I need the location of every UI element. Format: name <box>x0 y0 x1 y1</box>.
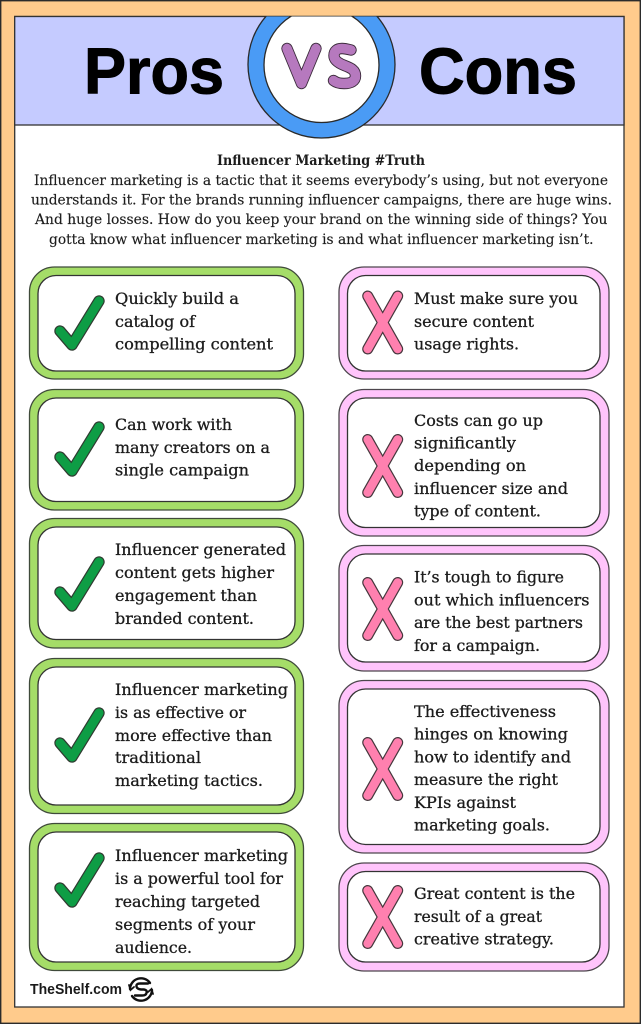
pro 5 text <box>115 846 288 957</box>
pro 1 text <box>115 289 274 354</box>
icon: check mark <box>60 858 99 902</box>
con 4 text: KPIs against <box>414 793 517 812</box>
pro 5 text: audience. <box>115 938 192 957</box>
pro 4 text <box>115 680 288 790</box>
con 3 text: out which influencers <box>414 590 590 610</box>
con 4 text: measure the right <box>414 770 559 789</box>
con 3 text: for a campaign. <box>414 636 540 655</box>
pro 3 text: content gets higher <box>115 563 274 582</box>
con 1 text: usage rights. <box>414 334 519 354</box>
pro 3 text: Influencer generated <box>115 540 286 559</box>
pro 3 text: branded content. <box>115 609 254 628</box>
intro paragraph <box>31 173 612 248</box>
intro heading: Influencer Marketing #Truth <box>217 153 425 169</box>
panel: pro 4 <box>30 658 304 814</box>
intro paragraph: gotta know what influencer marketing is and what influencer marketing isn’t. <box>49 232 594 248</box>
panel: pro 3 <box>30 518 304 648</box>
icon: X mark <box>368 296 398 349</box>
con 3 text: are the best partners <box>414 613 583 632</box>
panel: pro 1 <box>30 267 304 379</box>
pro 3 text: engagement than <box>115 586 257 605</box>
intro paragraph: understands it. For the brands running influencer campaigns, there are huge wins. <box>31 192 612 208</box>
con 5 text: Great content is the <box>414 884 575 903</box>
con 2 text: Costs can go up <box>414 411 543 430</box>
icon: check mark <box>60 562 99 606</box>
heading: Pros: Pros <box>84 34 224 108</box>
pro 3 text <box>115 540 286 628</box>
icon: check mark <box>60 301 99 345</box>
icon: brand logo <box>129 978 153 1001</box>
con 2 text: influencer size and <box>414 479 568 498</box>
pro 4 text: is as effective or <box>115 703 246 722</box>
pro 1 text: catalog of <box>115 312 196 331</box>
pro 2 text <box>115 415 270 480</box>
con 1 text: secure content <box>414 312 535 331</box>
brand name: TheShelf.com <box>30 982 122 998</box>
intro paragraph: And huge losses. How do you keep your brand on the winning side of things? You <box>34 212 608 228</box>
con 4 text: how to identify and <box>414 748 571 766</box>
con 3 text <box>414 568 590 655</box>
panel: con 3 <box>339 546 609 671</box>
pro 5 text: Influencer marketing <box>115 846 288 865</box>
con 2 text: type of content. <box>414 502 541 520</box>
con 1 text <box>414 289 578 354</box>
panel: con 5 <box>339 863 609 971</box>
pro 4 text: Influencer marketing <box>115 680 288 699</box>
heading: Cons: Cons <box>419 34 577 108</box>
icon: check mark <box>60 427 99 471</box>
con 5 text <box>414 884 575 948</box>
con 2 text: significantly <box>414 434 516 452</box>
con 4 text <box>414 702 571 834</box>
pro 2 text: Can work with <box>115 415 232 434</box>
panel: con 1 <box>339 267 609 379</box>
pro 4 text: marketing tactics. <box>115 771 263 790</box>
intro paragraph: Influencer marketing is a tactic that it seems everybody’s using, but not everyone <box>34 173 608 189</box>
pro 1 text: compelling content <box>115 334 274 354</box>
con 2 text: depending on <box>414 456 526 475</box>
VS badge <box>247 16 396 139</box>
con 4 text: The effectiveness <box>414 702 556 721</box>
panel: con 4 <box>339 680 609 853</box>
pro 4 text: traditional <box>115 748 201 767</box>
con 5 text: creative strategy. <box>414 930 554 948</box>
icon: X mark <box>368 582 398 636</box>
con 4 text: hinges on knowing <box>414 724 568 744</box>
pro 5 text: reaching targeted <box>115 892 260 911</box>
pro 5 text: is a powerful tool for <box>115 869 283 888</box>
con 1 text: Must make sure you <box>414 289 578 308</box>
pro 4 text: more effective than <box>115 726 272 745</box>
con 3 text: It’s tough to figure <box>414 568 564 586</box>
intro text block <box>31 153 612 248</box>
icon: X mark <box>368 440 398 492</box>
icon: X mark <box>368 742 398 796</box>
panel: con 2 <box>339 390 609 536</box>
pro 2 text: many creators on a <box>115 438 270 457</box>
icon: X mark <box>368 890 398 944</box>
pro 5 text: segments of your <box>115 915 255 934</box>
icon: check mark <box>60 713 99 757</box>
header band <box>15 16 624 125</box>
footer brand <box>30 978 153 1001</box>
pro 1 text: Quickly build a <box>115 289 239 308</box>
pro 2 text: single campaign <box>115 460 249 480</box>
con 5 text: result of a great <box>414 907 543 926</box>
panel: pro 2 <box>30 390 304 510</box>
con 2 text <box>414 411 568 520</box>
con 4 text: marketing goals. <box>414 816 550 834</box>
panel: pro 5 <box>30 824 304 970</box>
